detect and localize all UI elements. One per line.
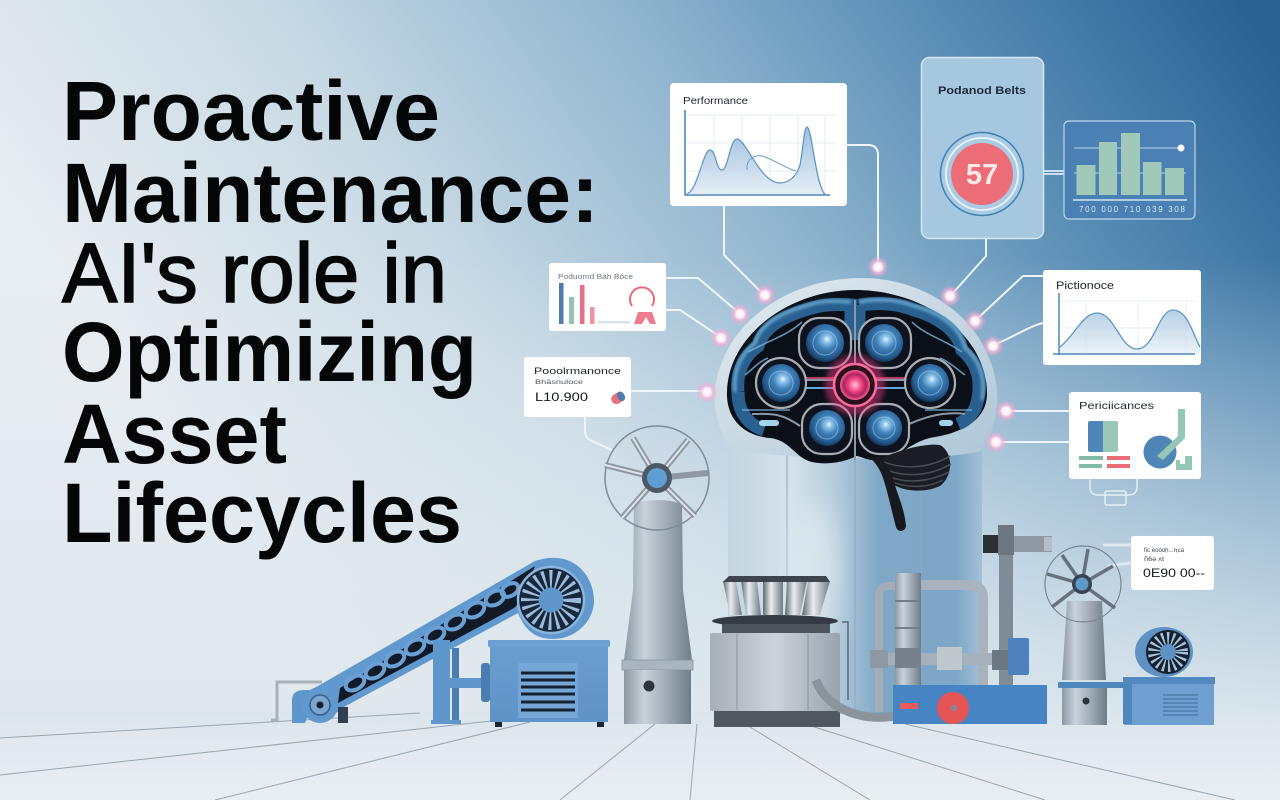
heading: Periciicances xyxy=(1079,400,1154,412)
tower base xyxy=(624,670,691,724)
connectors xyxy=(585,145,1131,566)
cups xyxy=(723,576,830,615)
panel: wave chart xyxy=(1043,270,1201,365)
cross pipe xyxy=(870,653,1010,665)
machine: small fan tower xyxy=(1045,546,1130,725)
value: 0E90 00-- xyxy=(1143,566,1205,580)
belt housing xyxy=(302,558,594,718)
split block xyxy=(1088,421,1118,452)
blower vent xyxy=(1163,695,1198,715)
machine: blue base with red wheel xyxy=(893,685,1047,724)
title: Maintenance: xyxy=(62,146,599,240)
tower collar xyxy=(622,660,693,670)
top plate xyxy=(712,615,838,627)
title: AI's role in xyxy=(62,226,447,320)
title: Lifecycles xyxy=(62,466,462,560)
right return pipe xyxy=(920,585,983,686)
icon: gauge xyxy=(630,287,656,324)
glowing traces xyxy=(762,420,950,426)
fan xyxy=(605,426,709,530)
hose xyxy=(816,680,895,717)
brain silhouette xyxy=(727,290,987,463)
tower body xyxy=(624,500,692,668)
machine: round unit xyxy=(710,576,895,727)
panel: mixed indicators xyxy=(1069,392,1201,479)
heading: Podanod Belts xyxy=(938,85,1026,97)
gauge xyxy=(940,132,1024,216)
left return pipe xyxy=(879,586,896,712)
small label: fic éoóoḥ...ꞑca xyxy=(1144,548,1185,554)
floor xyxy=(0,712,1280,800)
axis labels: 700 000 710 039 308 xyxy=(1079,205,1186,214)
panel: bar chart xyxy=(1064,121,1195,219)
heading: Performance xyxy=(683,95,748,107)
back riser xyxy=(999,553,1013,685)
small fan xyxy=(1045,546,1121,622)
title: Optimizing xyxy=(62,305,477,399)
blower housing xyxy=(1135,627,1193,677)
bars xyxy=(1076,133,1184,195)
central pink core xyxy=(825,355,885,415)
subheading: Bhāsnuloce xyxy=(535,380,584,386)
stand xyxy=(431,640,490,724)
bars xyxy=(559,283,630,324)
cerebral cortex xyxy=(738,304,979,430)
machine: pipework xyxy=(870,525,1052,712)
bracket under panel xyxy=(1090,479,1137,505)
body xyxy=(710,633,840,711)
legend bars xyxy=(1079,456,1130,468)
icon: pill xyxy=(609,390,627,406)
belt chain xyxy=(343,580,521,694)
foot xyxy=(714,711,840,727)
belt slot xyxy=(338,566,535,703)
circuit traces xyxy=(752,300,965,460)
panel: podanod belts xyxy=(922,58,1044,238)
brain stem xyxy=(870,456,906,531)
icon: rotor arm xyxy=(1144,409,1192,470)
central riser xyxy=(895,573,921,686)
machine: fan tower xyxy=(605,426,709,724)
cortex highlights xyxy=(735,300,983,400)
cortex folds xyxy=(742,322,972,410)
panel: bar summary xyxy=(549,263,666,331)
central column xyxy=(728,430,982,714)
neural nodes xyxy=(756,318,955,454)
vent xyxy=(518,663,578,718)
tail spout xyxy=(292,690,318,723)
cerebellum xyxy=(882,445,951,491)
panel: value callout xyxy=(1131,536,1214,590)
title: Asset xyxy=(62,387,287,481)
panel: performance area chart xyxy=(670,83,847,206)
heading: Pooolrmanonce xyxy=(534,366,621,377)
heading: Poduornd Bàh Bóce xyxy=(558,274,633,281)
connector glow dots xyxy=(696,256,1017,453)
blower cabinet xyxy=(1124,683,1214,725)
brain xyxy=(727,290,987,531)
small sublabel: ñ6ǝ ᴧt xyxy=(1144,557,1164,563)
small pipe xyxy=(271,682,322,720)
panel: performance value xyxy=(524,357,631,417)
title xyxy=(62,64,599,560)
heading: Pictionoce xyxy=(1056,280,1114,292)
machine: small blue blower xyxy=(1123,627,1215,725)
drive wheel xyxy=(518,567,584,633)
blue cabinet xyxy=(488,640,610,727)
tail roller xyxy=(302,687,348,723)
chart xyxy=(1053,293,1200,355)
title: Proactive xyxy=(62,64,440,158)
brain dome shell xyxy=(715,278,997,459)
tower button xyxy=(644,680,654,692)
value: L10.900 xyxy=(535,390,588,404)
machine: conveyor xyxy=(271,558,610,727)
chart xyxy=(685,110,830,195)
blue valve xyxy=(1008,638,1029,675)
gauge: 57 xyxy=(966,159,998,191)
